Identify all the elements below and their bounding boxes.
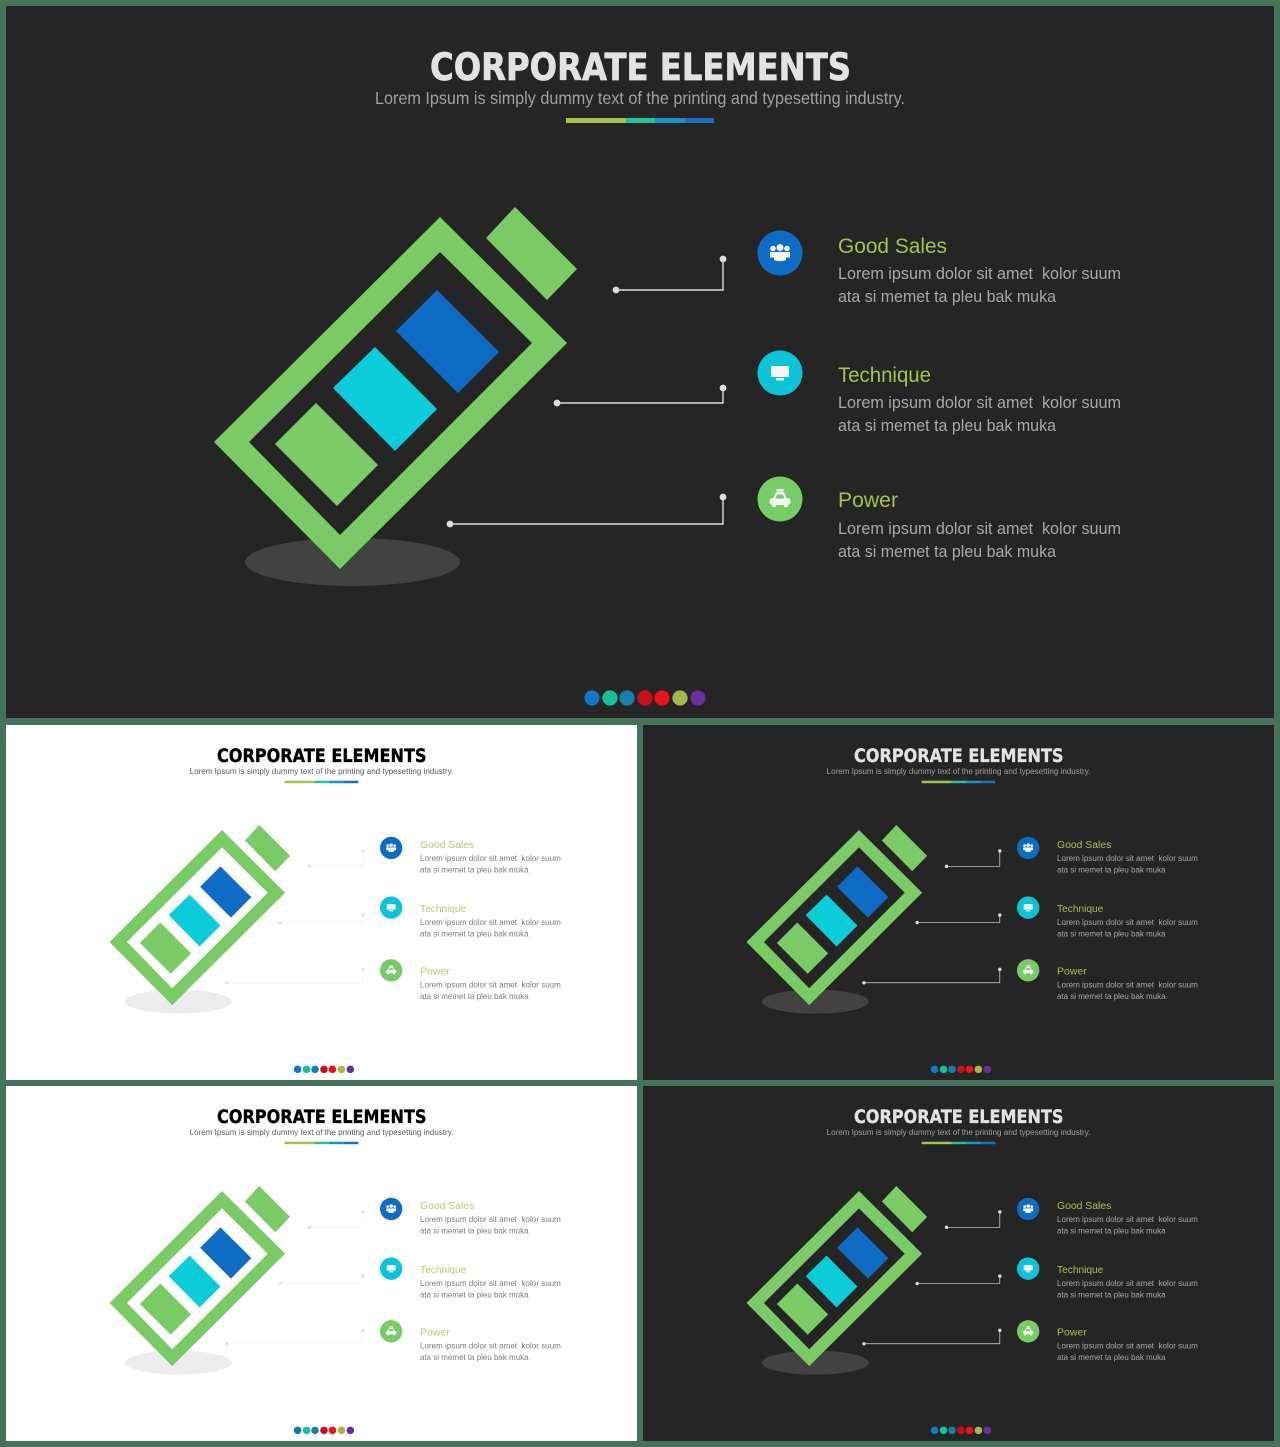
connector: technique [279,1274,364,1285]
text: technique: ata si memet ta pleu bak muka [420,928,529,938]
text: power [420,966,561,1001]
icon: taxi [758,476,802,522]
text: good sales: Good Sales [1057,840,1111,851]
icon: monitor [380,1257,402,1280]
title: CORPORATE ELEMENTS [430,46,851,89]
text: good sales: Lorem ipsum dolor sit amet kolor suum [420,853,561,863]
battery shadow [125,990,232,1014]
text: technique [420,904,561,938]
text: power: Power [838,489,898,512]
connector: good sales [613,256,726,293]
connector: technique [279,913,364,924]
panel: small light slide bottom left [6,1086,637,1441]
text: power: Lorem ipsum dolor sit amet kolor suum [420,1341,561,1351]
text: good sales: ata si memet ta pleu bak muka [420,1225,529,1235]
gradient underline [922,781,995,783]
text: technique: Technique [420,904,466,915]
pagination dots [931,1066,991,1073]
text: technique: Lorem ipsum dolor sit amet kolor suum [420,1278,561,1288]
text: technique: Technique [1057,1265,1103,1276]
text: power: Lorem ipsum dolor sit amet kolor suum [1057,1341,1198,1351]
text: technique [1057,904,1198,938]
panel: main dark slide [6,6,1274,718]
gradient underline [285,1142,358,1144]
gradient underline [922,1142,995,1144]
text: power: Power [1057,1327,1087,1338]
icon: taxi [1017,959,1039,982]
text: power: ata si memet ta pleu bak muka [1057,991,1166,1001]
text: power: ata si memet ta pleu bak muka [1057,1352,1166,1362]
connector: good sales [308,849,364,868]
text: power [1057,1327,1198,1362]
text: technique: ata si memet ta pleu bak muka [1057,1289,1166,1299]
text: good sales: ata si memet ta pleu bak muka [1057,864,1166,874]
text: power [420,1327,561,1362]
icon: monitor [1017,896,1039,919]
icon: people [1017,837,1039,859]
subtitle: Lorem Ipsum is simply dummy text of the printing and typesetting industry. [190,1127,453,1137]
text: good sales: Good Sales [1057,1201,1111,1212]
connector: power [225,968,364,984]
text: good sales: Good Sales [420,840,474,851]
connector: technique [916,1274,1001,1285]
icon: people [380,1198,402,1220]
icon: people [1017,1198,1039,1220]
text: power: Power [420,1327,450,1338]
text: good sales [420,840,561,874]
text: technique: Lorem ipsum dolor sit amet kolor suum [1057,917,1198,927]
connector: power [862,968,1001,984]
connector: technique [554,385,726,406]
text: technique [838,364,1121,435]
text: technique: ata si memet ta pleu bak muka [838,416,1056,435]
connector: good sales [945,849,1001,868]
gradient underline [566,118,714,123]
text: power: Lorem ipsum dolor sit amet kolor suum [1057,980,1198,990]
connector: power [447,494,726,527]
text: technique: Lorem ipsum dolor sit amet kolor suum [838,393,1121,412]
subtitle: Lorem Ipsum is simply dummy text of the printing and typesetting industry. [827,766,1090,776]
battery shadow [762,1351,869,1375]
subtitle: Lorem Ipsum is simply dummy text of the printing and typesetting industry. [375,88,905,108]
text: technique: ata si memet ta pleu bak muka [1057,928,1166,938]
connector: good sales [308,1210,364,1229]
text: technique [1057,1265,1198,1299]
panel: small dark slide bottom right [643,1086,1274,1441]
icon: monitor [380,896,402,919]
text: power: ata si memet ta pleu bak muka [420,1352,529,1362]
panel: small dark slide top right [643,725,1274,1080]
text: good sales: Good Sales [420,1201,474,1212]
text: technique: Lorem ipsum dolor sit amet kolor suum [1057,1278,1198,1288]
icon: monitor [758,350,802,396]
title: CORPORATE ELEMENTS [217,1107,426,1128]
text: technique: Technique [1057,904,1103,915]
text: power: ata si memet ta pleu bak muka [420,991,529,1001]
battery illustration [214,207,577,569]
text: good sales: ata si memet ta pleu bak muka [1057,1225,1166,1235]
subtitle: Lorem Ipsum is simply dummy text of the printing and typesetting industry. [190,766,453,776]
text: good sales [420,1201,561,1235]
subtitle: Lorem Ipsum is simply dummy text of the printing and typesetting industry. [827,1127,1090,1137]
title: CORPORATE ELEMENTS [854,1107,1063,1128]
battery illustration [747,825,927,1005]
text: power: Lorem ipsum dolor sit amet kolor suum [420,980,561,990]
pagination dots [294,1066,354,1073]
gradient underline [285,781,358,783]
text: power: Power [1057,966,1087,977]
text: technique [420,1265,561,1299]
connector: power [225,1329,364,1345]
icon: taxi [1017,1320,1039,1343]
connector: good sales [945,1210,1001,1229]
text: power: Lorem ipsum dolor sit amet kolor suum [838,519,1121,538]
text: good sales [838,235,1121,306]
pagination dots [931,1427,991,1434]
title: CORPORATE ELEMENTS [854,746,1063,767]
text: good sales: Lorem ipsum dolor sit amet kolor suum [1057,1214,1198,1224]
text: good sales [1057,1201,1198,1235]
text: power: ata si memet ta pleu bak muka [838,542,1056,561]
text: good sales: ata si memet ta pleu bak muka [420,864,529,874]
connector: technique [916,913,1001,924]
connector: power [862,1329,1001,1345]
icon: people [758,230,802,276]
text: power [838,489,1121,561]
icon: taxi [380,959,402,982]
battery illustration [110,1186,290,1366]
panel: small light slide top left [6,725,637,1080]
text: power: Power [420,966,450,977]
text: technique: Technique [838,364,931,387]
text: power [1057,966,1198,1001]
battery shadow [125,1351,232,1375]
text: good sales: Lorem ipsum dolor sit amet kolor suum [838,264,1121,283]
text: technique: Technique [420,1265,466,1276]
text: good sales: Good Sales [838,235,947,258]
icon: people [380,837,402,859]
icon: taxi [380,1320,402,1343]
text: technique: Lorem ipsum dolor sit amet kolor suum [420,917,561,927]
text: good sales [1057,840,1198,874]
battery shadow [245,538,460,586]
text: technique: ata si memet ta pleu bak muka [420,1289,529,1299]
text: good sales: ata si memet ta pleu bak muka [838,287,1056,306]
battery shadow [762,990,869,1014]
title: CORPORATE ELEMENTS [217,746,426,767]
battery illustration [110,825,290,1005]
pagination dots [584,690,706,706]
text: good sales: Lorem ipsum dolor sit amet kolor suum [1057,853,1198,863]
pagination dots [294,1427,354,1434]
battery illustration [747,1186,927,1366]
text: good sales: Lorem ipsum dolor sit amet kolor suum [420,1214,561,1224]
icon: monitor [1017,1257,1039,1280]
